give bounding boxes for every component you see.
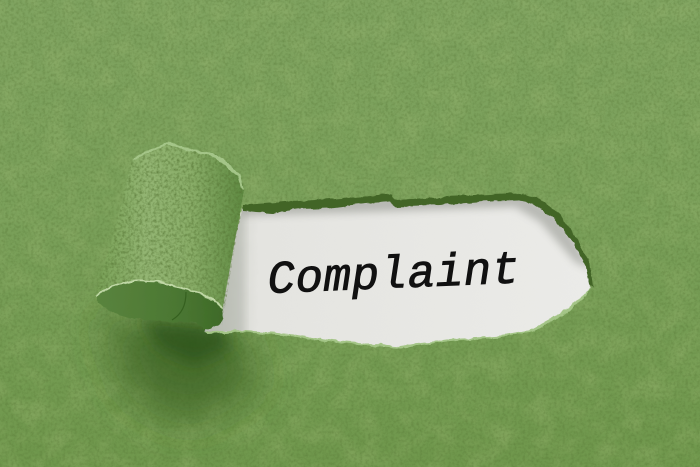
dark torn top edge [243,193,593,288]
pale underside rim [95,281,222,308]
torn opening showing white paper [205,192,593,350]
shadow cast by the roll [100,318,260,425]
roll outer surface [102,141,244,324]
paper roll [96,141,244,330]
inner curl line [172,292,186,320]
pale torn bottom edge [205,288,590,348]
pale top torn rim [132,141,244,190]
word: Complaint: Complaint [266,244,520,307]
roll underside [95,281,224,330]
